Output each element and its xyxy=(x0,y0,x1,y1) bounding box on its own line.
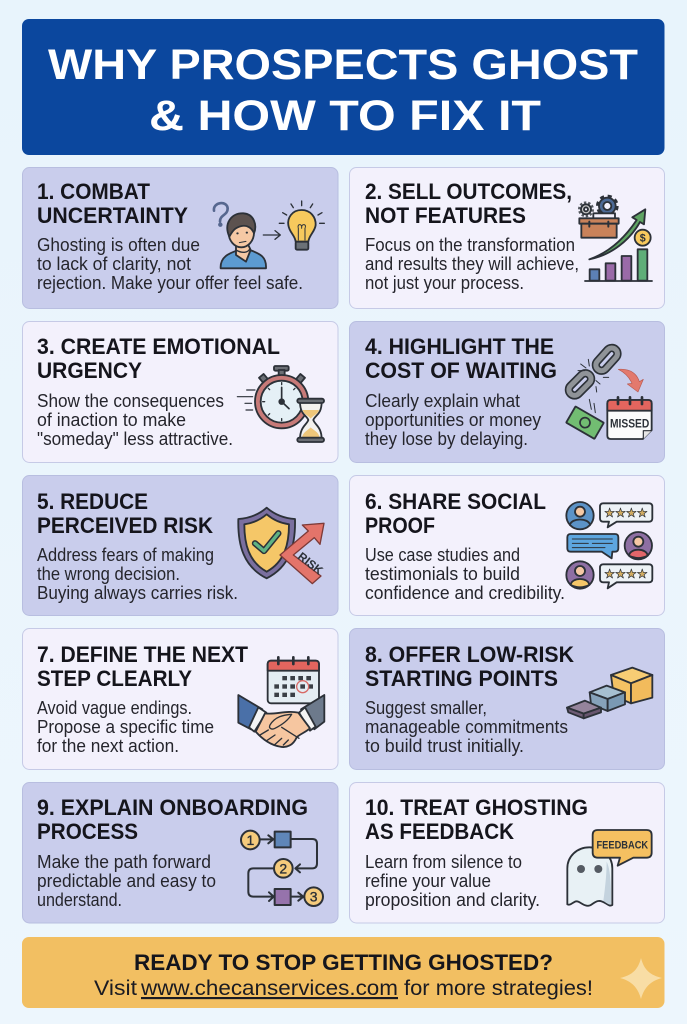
body 7: Avoid vague endings. xyxy=(37,698,192,718)
heading 10: AS FEEDBACK xyxy=(365,819,514,844)
heading 7 xyxy=(37,642,249,691)
body 9: Make the path forward xyxy=(37,852,211,872)
title: & HOW TO FIX IT xyxy=(149,92,541,140)
heading 6 xyxy=(365,489,546,538)
body 6: confidence and credibility. xyxy=(365,583,565,603)
call to action link line: for more strategies! xyxy=(404,976,593,1000)
icon: testimonials and ratings xyxy=(566,502,652,589)
body 8 xyxy=(365,698,568,756)
panel: 8 low-risk starting points xyxy=(350,628,664,770)
title xyxy=(48,41,638,140)
body 5 xyxy=(37,545,238,603)
heading 2: 2. SELL OUTCOMES, xyxy=(365,179,572,204)
icon: broken chain, money and missed calendar: MISSED xyxy=(610,417,650,431)
body 8: to build trust initially. xyxy=(365,736,524,756)
body 1: to lack of clarity, not xyxy=(37,254,191,274)
icon: process flow: 2 xyxy=(279,860,287,876)
body 2: Focus on the transformation xyxy=(365,235,575,255)
icon: process flow: 3 xyxy=(310,889,318,905)
body 9: understand. xyxy=(37,890,122,910)
body 6: Use case studies and xyxy=(365,545,520,565)
icon: ascending blocks xyxy=(567,668,652,718)
body 10 xyxy=(365,852,540,910)
panel: 2 sell outcomes xyxy=(350,168,664,308)
body 3: of inaction to make xyxy=(37,410,186,430)
panel: 1 combat uncertainty xyxy=(22,168,338,308)
body 4: Clearly explain what xyxy=(365,391,520,411)
heading 9: 9. EXPLAIN ONBOARDING xyxy=(37,795,308,820)
heading 4: COST OF WAITING xyxy=(365,358,557,383)
icon: broken chain, money and missed calendar xyxy=(566,346,652,439)
panel: 7 define next step xyxy=(22,628,338,770)
body 7 xyxy=(37,698,214,756)
panel: 10 ghosting as feedback xyxy=(350,782,664,923)
icon: thinking person to lightbulb xyxy=(214,201,324,268)
body 9 xyxy=(37,852,216,910)
body 4 xyxy=(365,391,541,449)
body 8: Suggest smaller, xyxy=(365,698,487,718)
body 7: Propose a specific time xyxy=(37,717,214,737)
body 1 xyxy=(37,235,303,293)
body 1: rejection. Make your offer feel safe. xyxy=(37,273,303,293)
heading 3 xyxy=(37,334,280,383)
call to action headline: READY TO STOP GETTING GHOSTED? xyxy=(134,950,553,975)
panel: 6 social proof xyxy=(350,476,664,616)
icon: process flow xyxy=(241,831,323,906)
heading 9 xyxy=(37,795,308,844)
heading 7: STEP CLEARLY xyxy=(37,666,192,691)
body 4: opportunities or money xyxy=(365,410,541,430)
icon: calendar and handshake xyxy=(238,657,324,747)
icon: toolbox, growth chart and coin xyxy=(579,196,652,281)
call to action link line: Visit xyxy=(94,976,137,1000)
call to action link line: www.checanservices.com xyxy=(140,976,398,1000)
icon: sparkle xyxy=(620,958,662,999)
body 5: Buying always carries risk. xyxy=(37,583,238,603)
heading 4 xyxy=(365,334,557,383)
heading 6: 6. SHARE SOCIAL xyxy=(365,489,546,514)
heading 5 xyxy=(37,489,213,538)
body 6 xyxy=(365,545,565,603)
icon: testimonials and ratings: ★★★★ xyxy=(604,506,648,520)
body 10: refine your value xyxy=(365,871,491,891)
icon: toolbox, growth chart and coin: $ xyxy=(640,233,646,245)
heading 1 xyxy=(37,179,188,228)
body 10: proposition and clarity. xyxy=(365,890,540,910)
body 3: "someday" less attractive. xyxy=(37,429,233,449)
title: WHY PROSPECTS GHOST xyxy=(48,41,638,89)
heading 5: 5. REDUCE xyxy=(37,489,148,514)
heading 8: STARTING POINTS xyxy=(365,666,558,691)
heading 8 xyxy=(365,642,574,691)
icon: ghost with feedback bubble: FEEDBACK xyxy=(596,839,649,851)
heading 8: 8. OFFER LOW-RISK xyxy=(365,642,574,667)
body 2: not just your process. xyxy=(365,273,524,293)
panel: 5 perceived risk xyxy=(22,476,338,616)
body 2: and results they will achieve, xyxy=(365,254,579,274)
call to action link line xyxy=(94,976,593,1000)
heading 4: 4. HIGHLIGHT THE xyxy=(365,334,554,359)
body 4: they lose by delaying. xyxy=(365,429,528,449)
body 8: manageable commitments xyxy=(365,717,568,737)
icon: process flow: 1 xyxy=(246,832,254,848)
body 6: testimonials to build xyxy=(365,564,520,584)
icon: shield and risk arrow: RISK xyxy=(295,549,326,578)
icon: ghost with feedback bubble xyxy=(567,830,652,906)
heading 2 xyxy=(365,179,572,228)
icon: testimonials and ratings: ★★★★ xyxy=(604,567,648,581)
heading 1: UNCERTAINTY xyxy=(37,203,188,228)
title banner xyxy=(22,19,664,155)
panel: 4 cost of waiting xyxy=(350,322,664,462)
heading 3: URGENCY xyxy=(37,358,142,383)
heading 2: NOT FEATURES xyxy=(365,203,526,228)
heading 1: 1. COMBAT xyxy=(37,179,151,204)
heading 9: PROCESS xyxy=(37,819,138,844)
body 2 xyxy=(365,235,579,293)
heading 10 xyxy=(365,795,588,844)
heading 3: 3. CREATE EMOTIONAL xyxy=(37,334,280,359)
body 10: Learn from silence to xyxy=(365,852,522,872)
panel: 9 onboarding process xyxy=(22,782,338,923)
body 5: Address fears of making xyxy=(37,545,214,565)
body 5: the wrong decision. xyxy=(37,564,180,584)
body 1: Ghosting is often due xyxy=(37,235,200,255)
body 9: predictable and easy to xyxy=(37,871,216,891)
icon: stopwatch and hourglass xyxy=(237,366,324,442)
heading 7: 7. DEFINE THE NEXT xyxy=(37,642,249,667)
body 3: Show the consequences xyxy=(37,391,224,411)
heading 5: PERCEIVED RISK xyxy=(37,513,213,538)
call to action footer xyxy=(22,937,664,1008)
body 3 xyxy=(37,391,233,449)
body 7: for the next action. xyxy=(37,736,179,756)
icon: shield and risk arrow xyxy=(238,508,326,584)
heading 10: 10. TREAT GHOSTING xyxy=(365,795,588,820)
panel: 3 emotional urgency xyxy=(22,322,338,462)
heading 6: PROOF xyxy=(365,513,435,538)
